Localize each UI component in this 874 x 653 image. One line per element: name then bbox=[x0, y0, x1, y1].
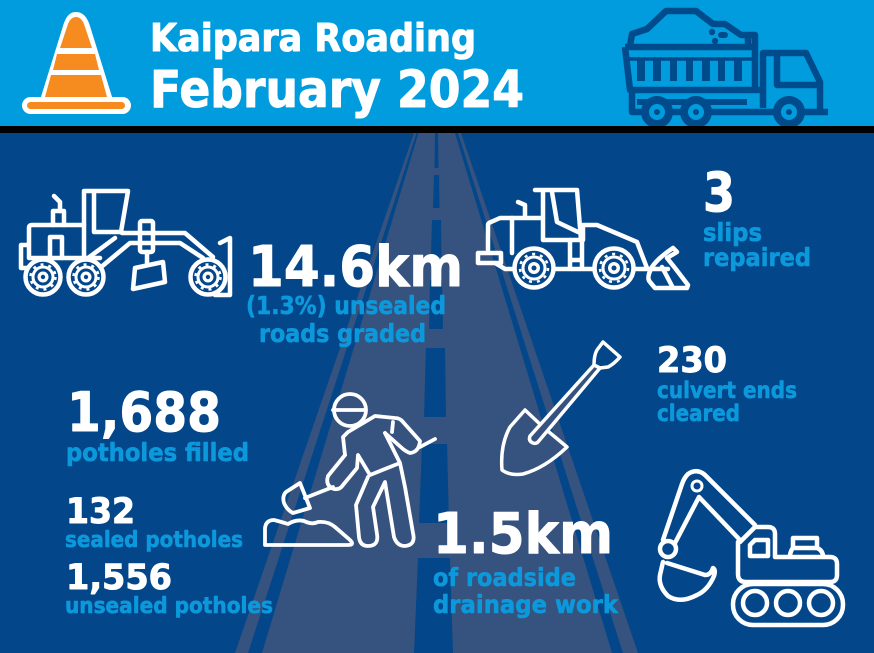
stat: potholes filled: 1,688 bbox=[67, 381, 221, 444]
stat: unsealed potholes: 1,556 bbox=[66, 558, 172, 598]
stat: culvert ends cleared: culvert ends bbox=[657, 378, 797, 404]
stat: slips repaired bbox=[703, 161, 811, 272]
stat: graded roads: (1.3%) unsealed bbox=[246, 291, 446, 320]
title: Kaipara Roading bbox=[150, 16, 476, 60]
stat: sealed potholes: 132 bbox=[66, 492, 135, 532]
stat: slips repaired: slips bbox=[703, 218, 762, 247]
icon: traffic cone bbox=[22, 12, 131, 114]
header banner bbox=[0, 0, 874, 126]
stat: unsealed potholes bbox=[65, 558, 273, 619]
stat: sealed potholes: sealed potholes bbox=[65, 528, 243, 553]
stat: graded roads: 14.6km bbox=[248, 235, 463, 300]
stat: culvert ends cleared: cleared bbox=[657, 401, 740, 427]
stat: slips repaired: repaired bbox=[703, 243, 811, 272]
stat: graded roads bbox=[246, 235, 463, 348]
stat: slips repaired: 3 bbox=[703, 161, 735, 224]
icon: loader bbox=[478, 190, 688, 288]
stat: drainage work: 1.5km bbox=[433, 502, 613, 567]
black divider bar bbox=[0, 126, 874, 133]
stat: potholes filled: potholes filled bbox=[66, 438, 249, 467]
title bbox=[150, 16, 524, 120]
stat: sealed potholes bbox=[65, 492, 243, 553]
stat: potholes filled bbox=[66, 381, 249, 467]
icon: dump truck bbox=[625, 11, 828, 128]
stat: culvert ends cleared bbox=[657, 341, 797, 427]
stat: drainage work: drainage work bbox=[433, 590, 619, 619]
road bbox=[235, 133, 638, 653]
stat: drainage work bbox=[433, 502, 619, 619]
icon: grader bbox=[21, 191, 230, 295]
stat: graded roads: roads graded bbox=[259, 319, 426, 348]
title: February 2024 bbox=[150, 61, 524, 120]
stat: culvert ends cleared: 230 bbox=[657, 341, 727, 381]
icon: shovel bbox=[502, 342, 620, 474]
stat: drainage work: of roadside bbox=[433, 563, 576, 592]
stat: unsealed potholes: unsealed potholes bbox=[65, 594, 273, 619]
icon: road worker with shovel bbox=[265, 394, 435, 546]
icon: excavator bbox=[660, 471, 843, 625]
